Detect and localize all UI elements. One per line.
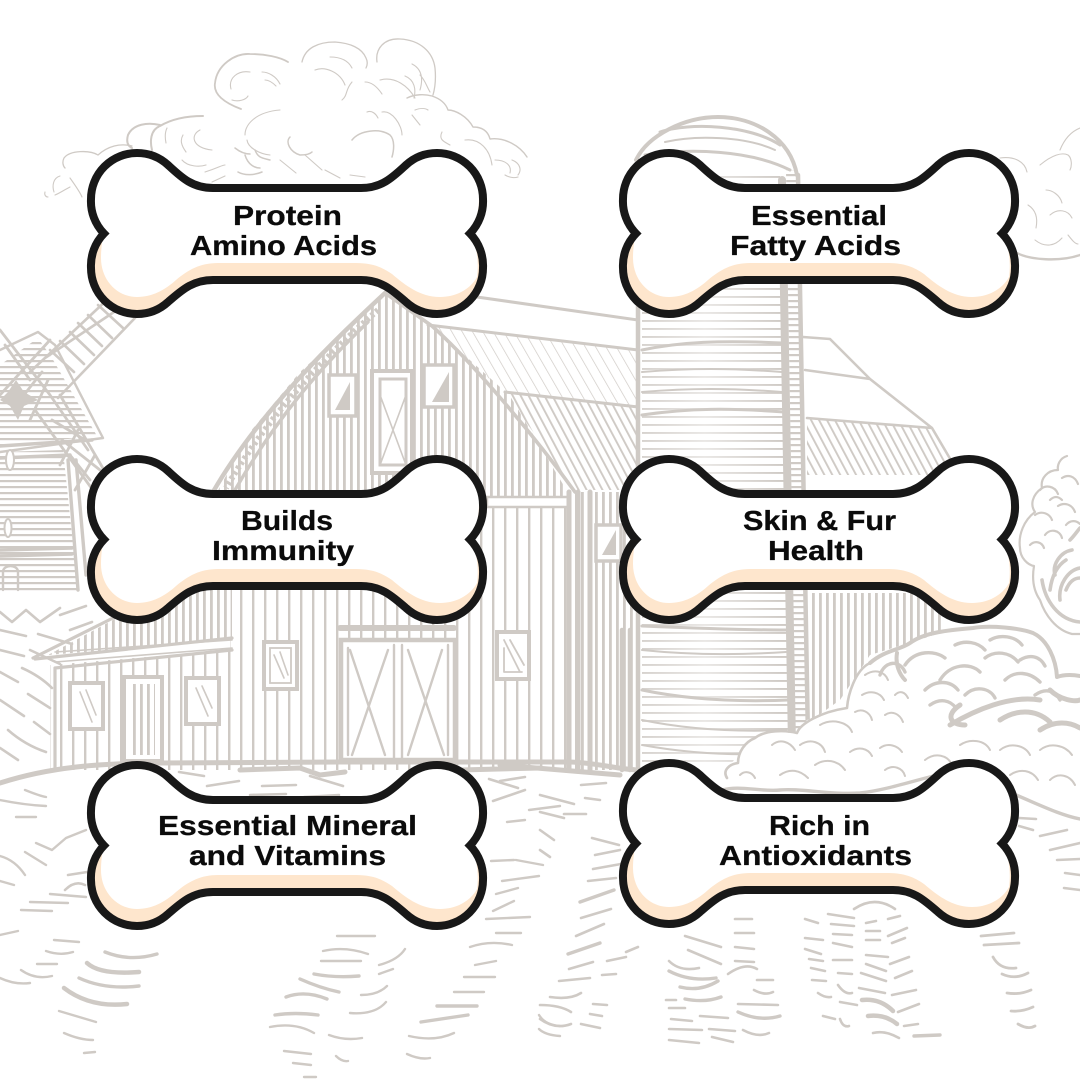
label: Essential Mineral and Vitamins: and Vitamins [189,840,386,871]
label: Builds Immunity: Builds [241,505,333,536]
label: Protein Amino Acids: Amino Acids [190,230,377,261]
large barn door [340,628,455,760]
bone: Essential Mineral and Vitamins [91,765,483,926]
label: Essential Fatty Acids [730,200,901,261]
side barn window [596,525,621,561]
rear barn wing [803,337,952,720]
bone: Protein Amino Acids [91,153,483,314]
bone: Builds Immunity [91,459,483,620]
lower barn windows [264,632,529,689]
label: Protein Amino Acids: Protein [233,200,342,231]
ground line and field furrows [0,606,1080,1077]
right tree [1020,456,1080,634]
windmill [0,297,135,592]
label: Essential Mineral and Vitamins [158,810,417,871]
upper barn windows [329,365,454,473]
label: Builds Immunity: Immunity [212,535,354,566]
label: Builds Immunity [212,505,354,566]
label: Skin and Fur Health [743,505,896,566]
label: Essential Fatty Acids: Essential [751,200,887,231]
label: Protein Amino Acids [190,200,377,261]
clouds [45,39,1080,259]
label: Rich in Antioxidants [719,810,912,871]
label: Skin and Fur Health: Skin & Fur [743,505,896,536]
bone: Rich in Antioxidants [623,763,1015,924]
bone: Skin and Fur Health [623,459,1015,620]
label: Essential Fatty Acids: Fatty Acids [730,230,901,261]
label: Rich in Antioxidants: Antioxidants [719,840,912,871]
shed [33,575,232,770]
label: Essential Mineral and Vitamins: Essential Mineral [158,810,417,841]
main barn [213,293,640,770]
bushes [722,627,1080,819]
label: Rich in Antioxidants: Rich in [769,810,870,841]
bone: Essential Fatty Acids [623,153,1015,314]
label: Skin and Fur Health: Health [768,535,864,566]
silo [622,117,810,770]
